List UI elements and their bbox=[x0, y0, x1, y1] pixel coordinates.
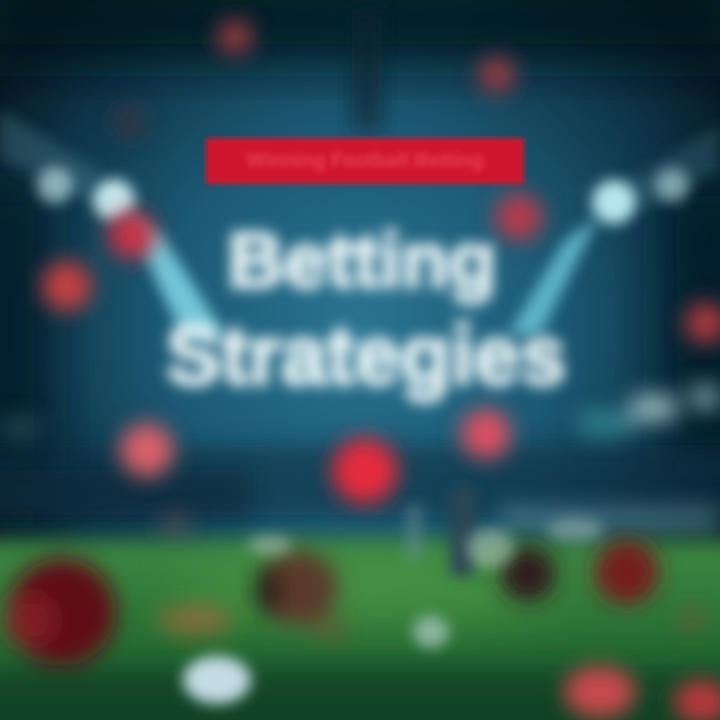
red chips on the field bbox=[157, 516, 720, 720]
stadium lights bbox=[37, 167, 689, 224]
stadium light beams bbox=[0, 110, 720, 340]
banner: red label bbox=[206, 138, 524, 184]
banner: red label: Winning Football Betting bbox=[247, 150, 483, 172]
footballs bbox=[4, 540, 659, 666]
floating red chips bbox=[42, 19, 720, 504]
field: grass bbox=[0, 540, 720, 720]
title bbox=[166, 216, 566, 402]
right side crowd highlights bbox=[0, 384, 720, 535]
white highlights on the field bbox=[183, 518, 603, 704]
title: Strategies bbox=[166, 308, 566, 402]
player figure bbox=[406, 488, 476, 576]
title: Betting bbox=[228, 216, 496, 304]
